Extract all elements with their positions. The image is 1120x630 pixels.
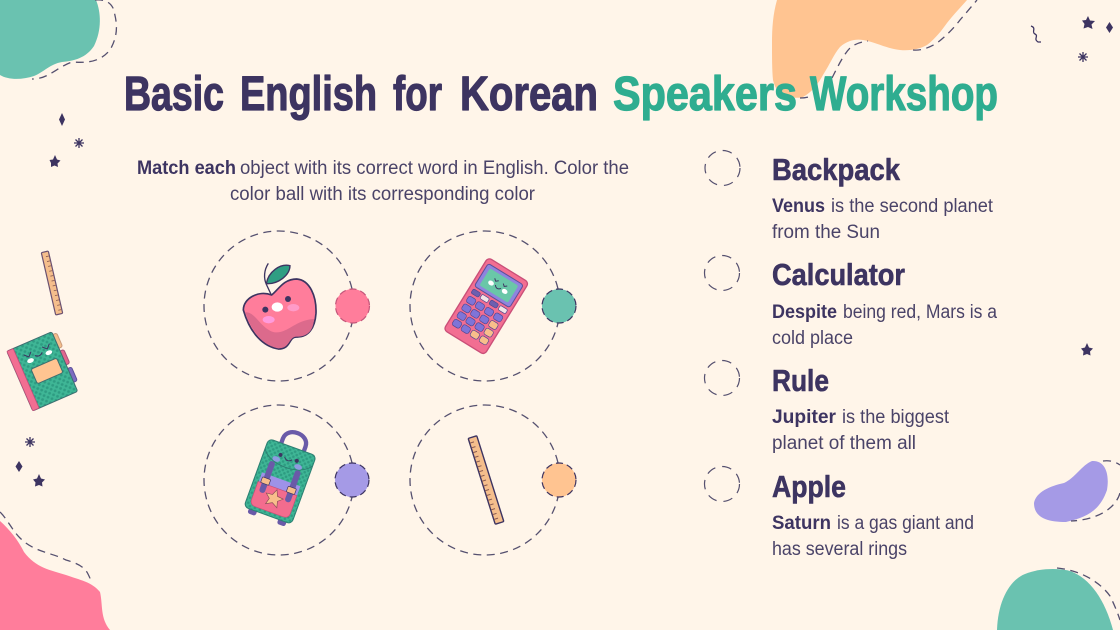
panel: backpack match circle	[204, 405, 369, 555]
answer item: Calculator: Calculator	[772, 257, 905, 292]
panel: apple match circle	[204, 231, 370, 381]
answer item: Apple: Saturn	[772, 513, 831, 534]
answer item: Backpack: Venus	[772, 196, 825, 217]
icon: backpack	[242, 424, 321, 529]
answer item: Apple: has several rings	[772, 539, 907, 560]
icon: notebook	[7, 330, 81, 411]
decorative stars left lower	[16, 437, 45, 486]
title: Workshop	[810, 68, 998, 121]
blob: top-left teal	[0, 0, 116, 79]
icon: ruler	[468, 436, 504, 524]
title: Korean	[460, 68, 598, 121]
color ball: orange	[542, 463, 576, 497]
instructions text: Match each	[137, 158, 236, 179]
title: English	[240, 68, 377, 121]
title: for	[393, 68, 442, 121]
decorative stars left upper	[50, 113, 84, 167]
answer item: Rule: Rule	[772, 363, 829, 398]
answer item: Backpack: Backpack	[772, 152, 901, 187]
answer item: Calculator: cold place	[772, 328, 853, 349]
icon: calculator	[444, 257, 529, 355]
title: Basic	[124, 68, 224, 121]
instructions text: color ball with its corresponding color	[230, 184, 536, 205]
answer item: Rule: is the biggest	[842, 407, 950, 428]
color ball: purple	[335, 463, 369, 497]
color ball: teal	[542, 289, 576, 323]
instructions text: object with its correct word in English. Color the	[240, 158, 629, 179]
title	[124, 68, 998, 121]
decorative star right	[1081, 343, 1093, 356]
answer item: Calculator: Despite	[772, 302, 837, 323]
panel: ruler match circle	[410, 405, 576, 555]
answer item: Backpack	[705, 150, 994, 243]
answer item: Apple	[704, 466, 974, 560]
answer item: Rule	[704, 360, 950, 454]
blob: bottom-right teal	[997, 568, 1120, 630]
answer item: Calculator: being red, Mars is a	[843, 302, 997, 323]
answer item: Apple: is a gas giant and	[837, 513, 974, 534]
icon: small ruler	[41, 251, 63, 315]
answer item: Backpack: is the second planet	[831, 196, 994, 217]
instructions text	[137, 158, 629, 205]
blob: bottom-left pink	[0, 512, 110, 630]
blob: top orange	[772, 0, 977, 98]
decorative stars top right	[1031, 16, 1113, 62]
answer item: Backpack: from the Sun	[772, 222, 880, 243]
answer item: Calculator	[704, 256, 997, 349]
title: Speakers	[613, 68, 797, 121]
color ball: pink	[336, 289, 370, 323]
answer item: Rule: Jupiter	[772, 407, 837, 428]
icon: apple	[243, 263, 316, 349]
answer item: Apple: Apple	[772, 469, 846, 504]
blob: right purple	[1034, 461, 1120, 522]
panel: calculator match circle	[410, 231, 576, 381]
answer item: Rule: planet of them all	[772, 433, 916, 454]
